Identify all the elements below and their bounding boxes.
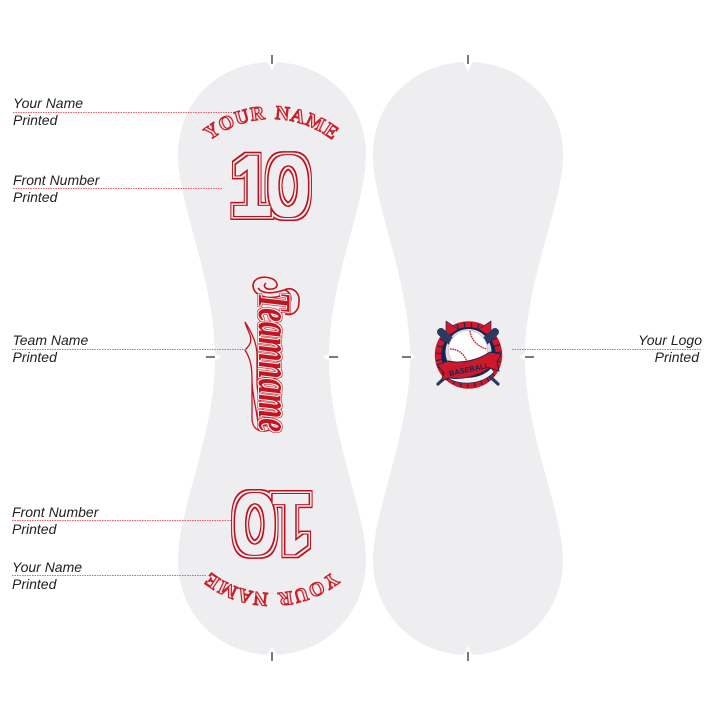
team name text: Teamname — [248, 292, 300, 432]
label: your logo — [512, 332, 702, 365]
bottom name text, upside down: YOUR NAME — [204, 572, 341, 606]
logo lower white arc — [445, 368, 494, 383]
team name T swirl — [253, 277, 299, 314]
panel: left jersey sleeve shape — [178, 62, 366, 655]
top front number 10: 10 — [230, 139, 306, 232]
label: front number bottom: Printed — [12, 521, 58, 537]
label: team name: Team Name — [12, 332, 88, 348]
label: your name bottom — [12, 559, 206, 592]
label: your name top: Your Name — [13, 95, 83, 111]
icon: baseball logo — [435, 321, 502, 388]
label: front number bottom: Front Number — [12, 504, 100, 520]
logo banner — [437, 352, 501, 381]
label: your logo: Printed — [655, 349, 700, 365]
label: your name top — [13, 95, 232, 128]
label: front number bottom — [12, 504, 231, 537]
team name script — [245, 277, 300, 432]
logo bats — [438, 331, 498, 384]
bottom front number 10, upside down: 10 — [237, 478, 313, 571]
panel: right jersey sleeve shape — [373, 62, 563, 655]
label: front number top: Printed — [13, 189, 59, 205]
logo wreath — [435, 322, 502, 388]
label: your name bottom: Printed — [12, 576, 58, 592]
label: team name — [12, 332, 246, 365]
alignment tick marks — [206, 55, 534, 661]
logo banner text: BASEBALL — [448, 361, 490, 378]
sleeve alignment notches — [214, 61, 526, 656]
label: your logo: Your Logo — [638, 332, 702, 348]
logo white ring — [444, 327, 494, 377]
top name text: YOUR NAME: YOUR NAME — [202, 106, 340, 140]
label: front number top — [13, 172, 222, 205]
label: team name: Printed — [12, 349, 58, 365]
label: your name bottom: Your Name — [12, 559, 82, 575]
label: your name top: Printed — [13, 112, 59, 128]
logo ball — [448, 330, 488, 370]
team name swoosh — [245, 322, 276, 431]
label: front number top: Front Number — [13, 172, 101, 188]
